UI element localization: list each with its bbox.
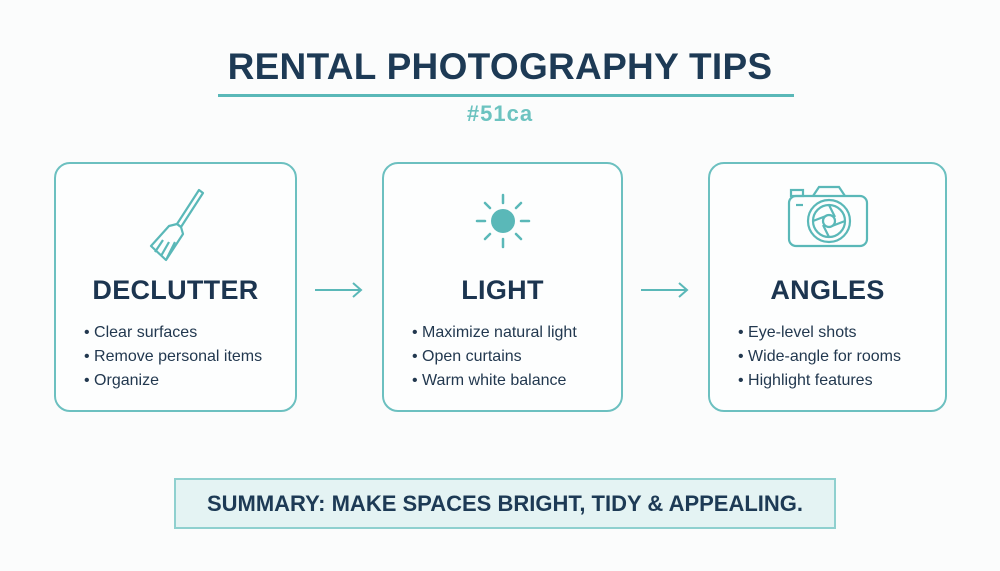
bullet list: Maximize natural light — [422, 324, 577, 341]
summary banner — [174, 478, 836, 529]
heading: ANGLES — [770, 275, 885, 305]
subtitle: #51ca — [467, 101, 533, 126]
icon: broom — [150, 188, 204, 262]
panel: angles — [708, 162, 947, 412]
arrow 1 — [315, 282, 362, 298]
heading: LIGHT — [461, 275, 544, 305]
panel: declutter — [54, 162, 297, 412]
bullet list: Remove personal items — [94, 348, 262, 365]
title: RENTAL PHOTOGRAPHY TIPS — [228, 46, 772, 87]
bullet list: Wide-angle for rooms — [748, 348, 901, 365]
panel: light — [382, 162, 623, 412]
title underline — [218, 94, 794, 97]
bullet list — [738, 324, 901, 389]
bullet list: Clear surfaces — [94, 324, 197, 341]
bullet list: Warm white balance — [422, 372, 566, 389]
summary banner: SUMMARY: MAKE SPACES BRIGHT, TIDY & APPEALING. — [207, 491, 803, 516]
bullet list: Eye-level shots — [748, 324, 857, 341]
heading: DECLUTTER — [92, 275, 259, 305]
icon: camera — [788, 186, 868, 248]
arrow 2 — [641, 282, 688, 298]
bullet list: Open curtains — [422, 348, 522, 365]
bullet list: Highlight features — [748, 372, 873, 389]
icon: sun — [476, 194, 530, 248]
bullet list — [412, 324, 577, 389]
bullet list: Organize — [94, 372, 159, 389]
bullet list — [84, 324, 262, 389]
